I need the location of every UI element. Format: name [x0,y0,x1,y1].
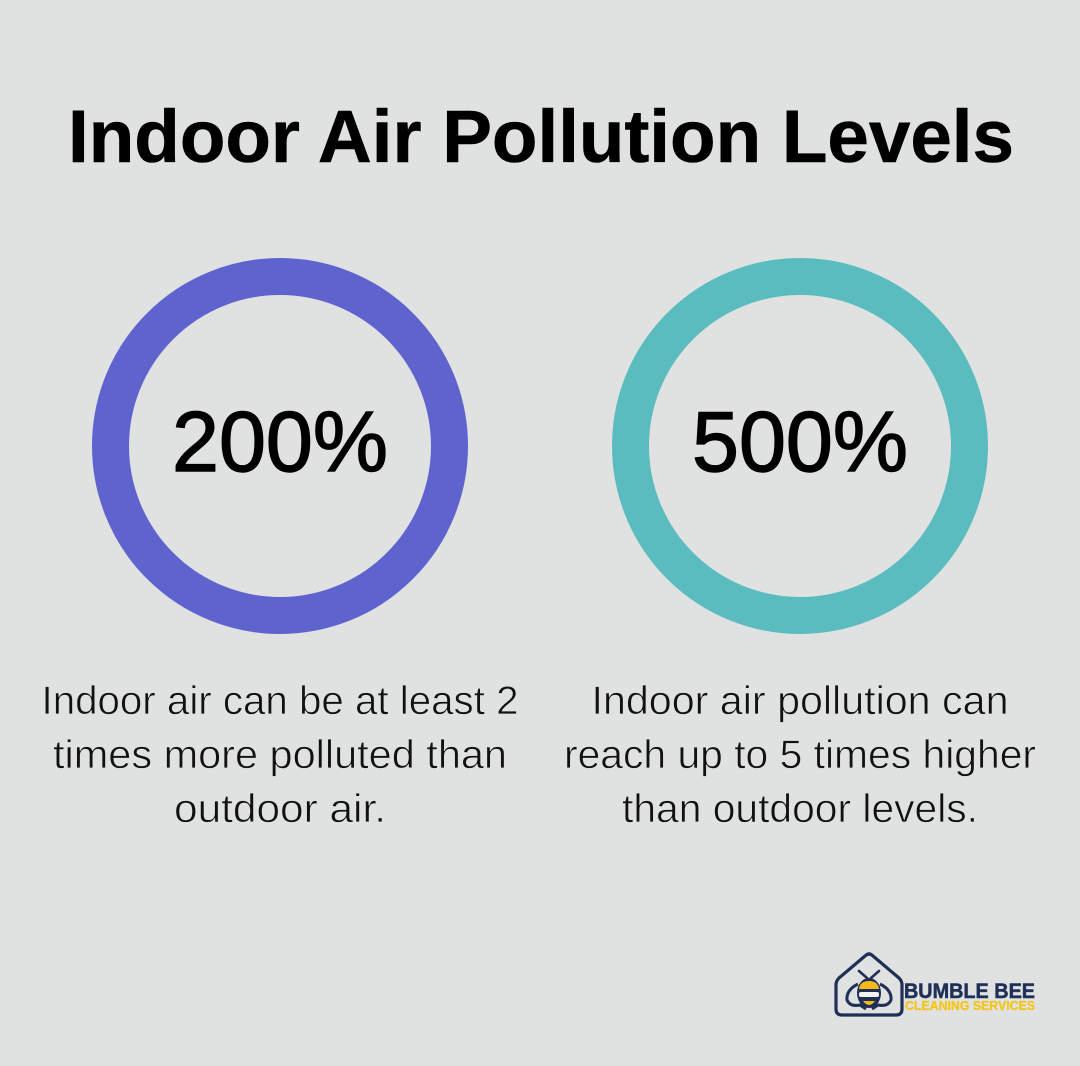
logo: Bumble Bee Cleaning Services [836,954,1035,1015]
logo tagline: CLEANING SERVICES [905,999,1035,1013]
description: 5 times: Indoor air pollution can [592,679,1008,723]
description: 5 times: reach up to 5 times higher [564,733,1036,777]
description: 5 times: than outdoor levels. [622,787,978,831]
panel: 500% statistic [564,276,1036,831]
ring: purple [110,276,450,616]
number: 200%: 200% [172,395,388,490]
description: 2 times: Indoor air can be at least 2 [42,679,518,723]
description: 2 times [42,679,518,831]
description: 2 times: times more polluted than [53,733,507,777]
description: 5 times [564,679,1036,831]
ring: teal [630,276,970,616]
panel: 200% statistic [42,276,518,831]
icon: house outline with bee [836,954,902,1015]
description: 2 times: outdoor air. [174,787,386,831]
logo wordmark: BUMBLE BEE [904,980,1035,1003]
title: Indoor Air Pollution Levels [68,95,1014,178]
number: 500%: 500% [692,395,908,490]
